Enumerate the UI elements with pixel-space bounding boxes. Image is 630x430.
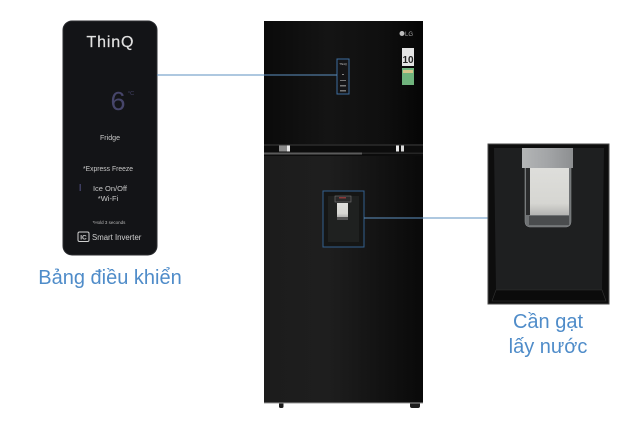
panel temperature display: °C bbox=[128, 91, 134, 97]
panel logo: Smart Inverter: IC bbox=[80, 234, 87, 242]
label: control panel: Bảng điều khiển bbox=[38, 267, 182, 289]
dispenser lever dark sides bbox=[526, 168, 530, 215]
panel indicator light bbox=[80, 184, 81, 191]
LG logo bbox=[400, 31, 413, 38]
energy label bbox=[402, 48, 414, 85]
energy label: 10 bbox=[402, 55, 414, 66]
panel logo: Smart Inverter bbox=[78, 232, 142, 242]
connector line: control panel to fridge bbox=[157, 74, 337, 76]
LG logo: LG bbox=[405, 32, 413, 38]
label: dispenser lever: lấy nước bbox=[509, 336, 587, 358]
label: dispenser lever bbox=[509, 311, 587, 358]
bottom door bbox=[264, 156, 423, 403]
dispenser lever lower reflection bbox=[529, 216, 569, 225]
panel label: Wi-Fi: *Wi-Fi bbox=[98, 194, 119, 203]
feet bbox=[279, 402, 420, 408]
panel note: Hold 3 seconds: *Hold 3 seconds bbox=[93, 220, 126, 225]
label: dispenser lever: Cần gạt bbox=[513, 311, 583, 333]
recess tray bbox=[492, 290, 606, 301]
panel brand: ThinQ: ThinQ bbox=[86, 34, 134, 51]
control panel bbox=[63, 21, 157, 255]
mini water dispenser with highlight bbox=[323, 191, 364, 247]
panel label: Fridge: Fridge bbox=[100, 135, 120, 142]
connector line: fridge to dispenser bbox=[364, 217, 488, 219]
mini control panel with highlight: ThinQ bbox=[339, 62, 348, 66]
refrigerator bbox=[264, 21, 423, 408]
dispenser detail image bbox=[488, 144, 609, 304]
top door bbox=[264, 21, 423, 144]
mini control panel with highlight bbox=[337, 59, 349, 94]
dispenser top cap bbox=[522, 148, 573, 168]
dispenser lever frame bbox=[525, 168, 571, 227]
panel logo: Smart Inverter: Smart Inverter bbox=[92, 233, 142, 242]
panel label: Express Freeze: *Express Freeze bbox=[83, 164, 133, 173]
panel label: Ice On/Off: Ice On/Off bbox=[93, 184, 128, 193]
recess back wall bbox=[494, 148, 604, 290]
dispenser lever steel face bbox=[530, 168, 569, 215]
hinge band bbox=[264, 144, 423, 156]
panel temperature display: 6 bbox=[110, 89, 126, 119]
panel temperature display bbox=[110, 89, 134, 119]
